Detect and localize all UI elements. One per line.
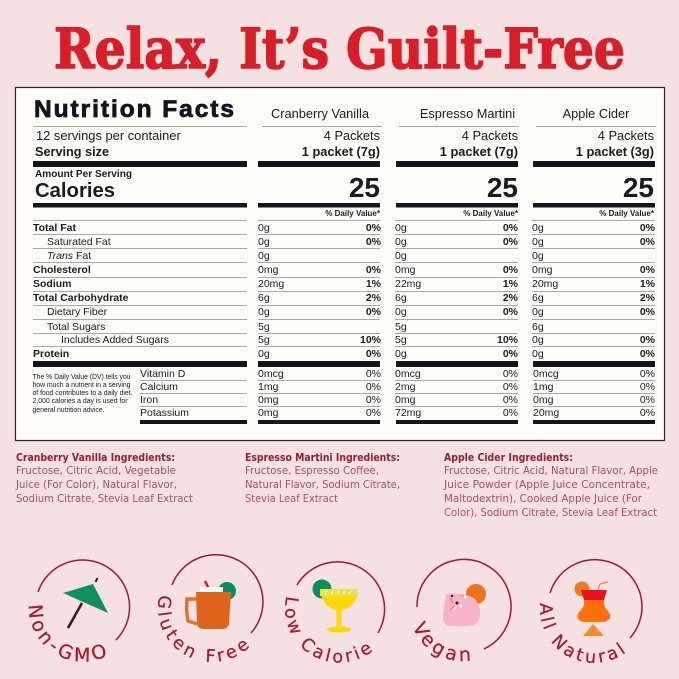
column: apple cider: 6g [532, 292, 544, 304]
label column: Saturated Fat [47, 236, 111, 248]
column: apple cider: 0g [532, 222, 544, 234]
label column: Calories [35, 180, 115, 202]
column: cranberry vanilla: % Daily Value* [325, 209, 381, 218]
ingredients: apple cider: Apple Cider Ingredients: [444, 452, 573, 464]
badge: vegan: Vegan [414, 620, 470, 662]
column: cranberry vanilla: 5g [258, 334, 270, 346]
label column [33, 126, 247, 424]
column: cranberry vanilla: 2% [366, 292, 382, 304]
ingredients: cranberry vanilla: Sodium Citrate, Stevia Leaf Extract [16, 493, 193, 505]
column: cranberry vanilla: 20mg [258, 278, 284, 290]
column: cranberry vanilla: 0% [366, 368, 381, 380]
label column: Serving size [35, 145, 109, 159]
column: espresso martini: 0mg [395, 264, 416, 276]
badge: vegan [414, 558, 512, 662]
title: Relax, It’s Guilt-Free [54, 16, 625, 81]
column: apple cider: 0% [640, 264, 656, 276]
column: espresso martini: 0g [395, 306, 407, 318]
column: espresso martini: 0% [503, 236, 519, 248]
ingredients: apple cider: Juice Powder (Apple Juice Concentrate, [443, 479, 650, 491]
column: apple cider: 0% [640, 407, 655, 419]
column: espresso martini: 0% [503, 348, 519, 360]
label column: Amount Per Serving [35, 169, 132, 180]
column: apple cider: 25 [623, 172, 654, 203]
column: apple cider: 0% [640, 334, 656, 346]
column: espresso martini: 0% [503, 394, 518, 406]
column: espresso martini: 5g [395, 334, 407, 346]
column: cranberry vanilla: 0g [258, 250, 270, 262]
column: apple cider: 0g [532, 250, 544, 262]
daily value footnote: how much a nutrient in a serving [32, 382, 131, 389]
label column: Trans Fat [47, 250, 91, 262]
column: espresso martini: 0g [395, 222, 407, 234]
column: apple cider: 1mg [533, 381, 554, 393]
column: apple cider: 4 Packets [598, 128, 654, 143]
column: espresso martini: 0g [395, 236, 407, 248]
ingredients: apple cider [443, 452, 658, 519]
daily value footnote: general nutrition advice. [32, 407, 105, 414]
column: apple cider: 0% [640, 222, 656, 234]
column: apple cider: 0% [640, 368, 655, 380]
column: cranberry vanilla: 0% [366, 394, 381, 406]
column: cranberry vanilla: 0g [258, 236, 270, 248]
heading: nutrition facts: Nutrition Facts [34, 96, 234, 123]
column: apple cider: 20mg [533, 407, 559, 419]
column: apple cider: 0% [640, 236, 656, 248]
label column: Potassium [140, 407, 189, 419]
column: apple cider: 0mg [533, 394, 554, 406]
daily value footnote: of food contributes to a daily diet. [32, 390, 133, 397]
column: cranberry vanilla: 0% [366, 236, 382, 248]
column: cranberry vanilla: 0% [366, 264, 382, 276]
column: espresso martini: Espresso Martini [420, 106, 515, 121]
column: espresso martini: 72mg [395, 407, 421, 419]
badge: all natural [540, 558, 643, 664]
badge: low calorie [284, 561, 386, 663]
column: apple cider: 2% [640, 292, 656, 304]
column: espresso martini: 10% [497, 334, 519, 346]
column: espresso martini: 0% [503, 407, 518, 419]
column: espresso martini: 0g [395, 250, 407, 262]
column: espresso martini: 5g [395, 321, 407, 333]
column: espresso martini: 22mg [395, 278, 421, 290]
column: cranberry vanilla: 0% [366, 306, 382, 318]
ingredients: apple cider: Fructose, Citric Acid, Natural Flavor, Apple [444, 465, 658, 477]
ingredients: espresso martini: Espresso Martini Ingredients: [245, 452, 400, 464]
icon: pink drink [443, 584, 486, 626]
column: apple cider: Apple Cider [563, 106, 630, 121]
icon: margarita glass [312, 580, 358, 632]
label column: Total Sugars [47, 321, 105, 333]
column: espresso martini: 0% [503, 264, 519, 276]
label column: Cholesterol [33, 264, 91, 276]
icon: orange cocktail [574, 582, 610, 636]
label column: Calcium [140, 381, 178, 393]
column: apple cider: 1 packet (3g) [576, 144, 654, 159]
column: cranberry vanilla: 0% [366, 407, 381, 419]
column: espresso martini: 4 Packets [462, 128, 518, 143]
column: espresso martini: 0% [503, 222, 519, 234]
column: espresso martini [395, 106, 519, 424]
daily value footnote [32, 374, 133, 414]
badge: gluten free [158, 554, 264, 662]
label column: Protein [33, 348, 69, 360]
ingredients: cranberry vanilla: Juice (For Color), Natural Flavor, [15, 479, 177, 491]
column: espresso martini: 1 packet (7g) [440, 144, 518, 159]
column: espresso martini: 1% [503, 278, 519, 290]
column: espresso martini: 0% [503, 306, 519, 318]
column: espresso martini: 6g [395, 292, 407, 304]
column: cranberry vanilla: Cranberry Vanilla [271, 106, 370, 121]
label column: Vitamin D [140, 368, 186, 380]
label column: Sodium [33, 278, 72, 290]
column: apple cider: 0% [640, 381, 655, 393]
column: espresso martini: % Daily Value* [463, 209, 519, 218]
ingredients: espresso martini: Fructose, Espresso Coffee, [245, 465, 379, 477]
column: espresso martini: 2% [503, 292, 519, 304]
column: apple cider: 0g [532, 236, 544, 248]
column: apple cider [532, 106, 656, 424]
panel: nutrition facts table [16, 88, 664, 440]
label column: Total Fat [33, 222, 76, 234]
icon: green umbrella [63, 578, 108, 628]
column: cranberry vanilla: 0mg [258, 407, 279, 419]
label column: Iron [140, 394, 158, 406]
column: cranberry vanilla: 0g [258, 222, 270, 234]
column: espresso martini: 2mg [395, 381, 416, 393]
column: apple cider: 0g [532, 306, 544, 318]
column: apple cider: 0% [640, 394, 655, 406]
ingredients: espresso martini [245, 452, 400, 505]
column: cranberry vanilla: 0% [366, 222, 382, 234]
ingredients: cranberry vanilla: Fructose, Citric Acid, Vegetable [16, 465, 176, 477]
column: cranberry vanilla: 1mg [258, 381, 279, 393]
column: cranberry vanilla: 0g [258, 306, 270, 318]
badge: non-gmo [28, 559, 130, 662]
ingredients: cranberry vanilla [15, 452, 193, 505]
column: apple cider: 0mg [532, 264, 553, 276]
badge: non-gmo: Non-GMO [28, 605, 106, 662]
column: espresso martini: 0g [395, 348, 407, 360]
badge: gluten free: Gluten Free [158, 596, 249, 662]
column: apple cider: % Daily Value* [599, 209, 655, 218]
badge: all natural: All Natural [540, 603, 625, 664]
column: apple cider: 0% [640, 348, 656, 360]
column: cranberry vanilla: 0% [366, 348, 382, 360]
column: espresso martini: 0mg [395, 394, 416, 406]
column: apple cider: 0g [532, 334, 544, 346]
label column: Total Carbohydrate [33, 292, 129, 304]
daily value footnote: The % Daily Value (DV) tells you [32, 374, 131, 381]
column: cranberry vanilla: 5g [258, 321, 270, 333]
column: cranberry vanilla: 6g [258, 292, 270, 304]
column: apple cider: 0mcg [533, 368, 559, 380]
ingredients: apple cider: Color), Sodium Citrate, Stevia Leaf Extract [444, 507, 657, 519]
column: espresso martini: 0mcg [395, 368, 421, 380]
column: cranberry vanilla: 10% [360, 334, 382, 346]
column: apple cider: 0g [532, 348, 544, 360]
column: espresso martini: 0% [503, 368, 518, 380]
column: cranberry vanilla: 0mcg [258, 368, 284, 380]
column: cranberry vanilla: 1 packet (7g) [302, 144, 380, 159]
column: cranberry vanilla: 4 Packets [324, 128, 380, 143]
column: cranberry vanilla: 0mg [258, 264, 279, 276]
column: apple cider: 20mg [532, 278, 558, 290]
daily value footnote: 2,000 calories a day is used for [32, 398, 128, 405]
badge: low calorie: Low Calorie [284, 597, 372, 663]
label column: Includes Added Sugars [61, 334, 169, 346]
label column: 12 servings per container [36, 128, 181, 143]
ingredients: espresso martini: Natural Flavor, Sodium Citrate, [245, 479, 400, 491]
column: cranberry vanilla: 0% [366, 381, 381, 393]
column: apple cider: 0% [640, 306, 656, 318]
column: cranberry vanilla: 0g [258, 348, 270, 360]
column: cranberry vanilla [258, 106, 382, 424]
ingredients: apple cider: Maltodextrin), Cooked Apple Juice (For [444, 493, 643, 505]
column: apple cider: 6g [532, 321, 544, 333]
ingredients: cranberry vanilla: Cranberry Vanilla Ingredients: [16, 452, 175, 464]
column: cranberry vanilla: 0mg [258, 394, 279, 406]
column: espresso martini: 25 [487, 172, 518, 203]
icon: copper mug [187, 581, 236, 629]
column: apple cider: 1% [640, 278, 656, 290]
ingredients: espresso martini: Stevia Leaf Extract [245, 493, 338, 505]
label column: Dietary Fiber [47, 306, 108, 318]
column: espresso martini: 0% [503, 381, 518, 393]
column: cranberry vanilla: 1% [366, 278, 382, 290]
column: cranberry vanilla: 25 [349, 172, 380, 203]
